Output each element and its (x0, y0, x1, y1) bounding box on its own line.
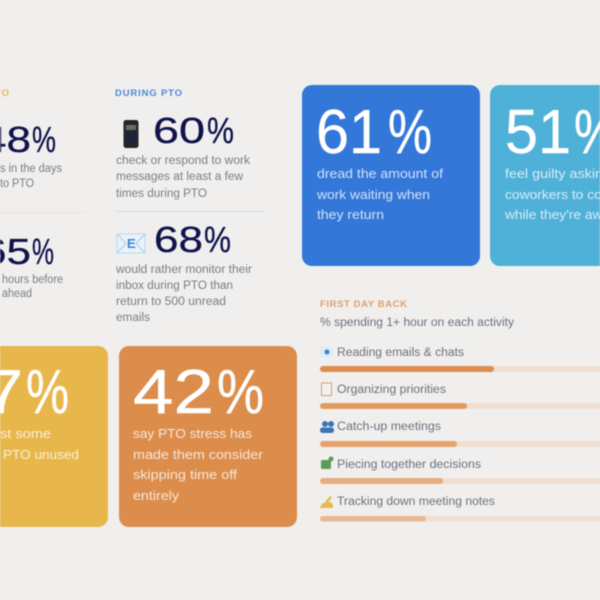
stat: 68% (154, 219, 231, 260)
text: 60% description (116, 155, 250, 200)
icon: phone (124, 120, 138, 148)
text: 68% description: return to 500 unread (116, 296, 226, 308)
card: 42% skipping: entirely (133, 488, 180, 503)
text: 68% description: would rather monitor their (115, 264, 252, 276)
card: 61% dread: 61 (316, 98, 382, 167)
row: organizing priorities (320, 383, 600, 409)
row: catch-up meetings (320, 421, 600, 447)
heading: during PTO: DURING PTO (115, 88, 182, 99)
row: piecing together decisions: Piecing together decisions (337, 459, 481, 471)
card: 42% skipping: say PTO stress has (133, 426, 253, 441)
row: tracking down meeting notes (320, 496, 600, 522)
card: 7% unused: PTO unused (3, 447, 79, 462)
text: 60% description: check or respond to work (116, 155, 250, 167)
stat: 68%: % (204, 219, 231, 260)
panel: first day back (320, 299, 600, 522)
stat: 68%: 68 (154, 219, 203, 260)
icon: envelope: E (127, 236, 136, 251)
card: 51% guilty: feel guilty asking (505, 166, 600, 181)
row: reading emails: Reading emails & chats (337, 347, 464, 359)
row: reading emails (320, 347, 600, 372)
card: 51% guilty: 51 (505, 98, 571, 167)
card: 42% skipping: made them consider (133, 447, 264, 462)
stat: 65%: % (32, 231, 54, 272)
card: 61% dread: dread the amount of (317, 166, 443, 181)
card: 7% unused: st some (0, 426, 51, 441)
text: 60% description: messages at least a few (116, 171, 244, 183)
stat: 65% (0, 231, 63, 300)
card: 42% skipping: % (217, 358, 264, 427)
text: 68% description: inbox during PTO than (116, 280, 233, 292)
text: 68% description: emails (116, 312, 150, 324)
row: piecing together decisions (320, 456, 600, 484)
card: 51% guilty (490, 85, 600, 266)
row: catch-up meetings: Catch-up meetings (337, 421, 441, 433)
card: 61% dread: work waiting when (316, 187, 430, 202)
card: 42% skipping: 42 (133, 358, 214, 427)
card: 42% skipping: skipping time off (133, 467, 237, 482)
subtitle: % spending 1+ hour on each activity (320, 317, 514, 329)
panel: during PTO (115, 88, 264, 324)
card: 42% skipping (119, 346, 297, 527)
heading: first day back: FIRST DAY BACK (320, 299, 407, 310)
card: 61% dread (302, 85, 480, 266)
text: 68% description (115, 264, 252, 324)
icon: envelope (117, 234, 145, 253)
stat: 60% (153, 110, 234, 151)
card: 7% unused: % (26, 358, 69, 427)
text: 60% description: times during PTO (116, 188, 207, 200)
card: 61% dread: % (388, 98, 432, 167)
stat: 65%: hours before (2, 274, 63, 286)
stat: 48%: % (32, 119, 56, 160)
row: organizing priorities: Organizing priorities (337, 384, 446, 396)
row: tracking down meeting notes: Tracking down meeting notes (337, 496, 495, 508)
panel: before PTO (0, 88, 86, 300)
stat: 60%: 60 (153, 110, 205, 151)
stat: 48%: to PTO (0, 178, 34, 190)
card: 61% dread: they return (317, 207, 384, 222)
stat: 48%: s in the days (0, 163, 62, 175)
card: 7% unused (0, 346, 108, 527)
stat: 48% (0, 119, 62, 190)
stat: 60%: % (207, 110, 234, 151)
stat: 65%: ahead (2, 288, 32, 300)
